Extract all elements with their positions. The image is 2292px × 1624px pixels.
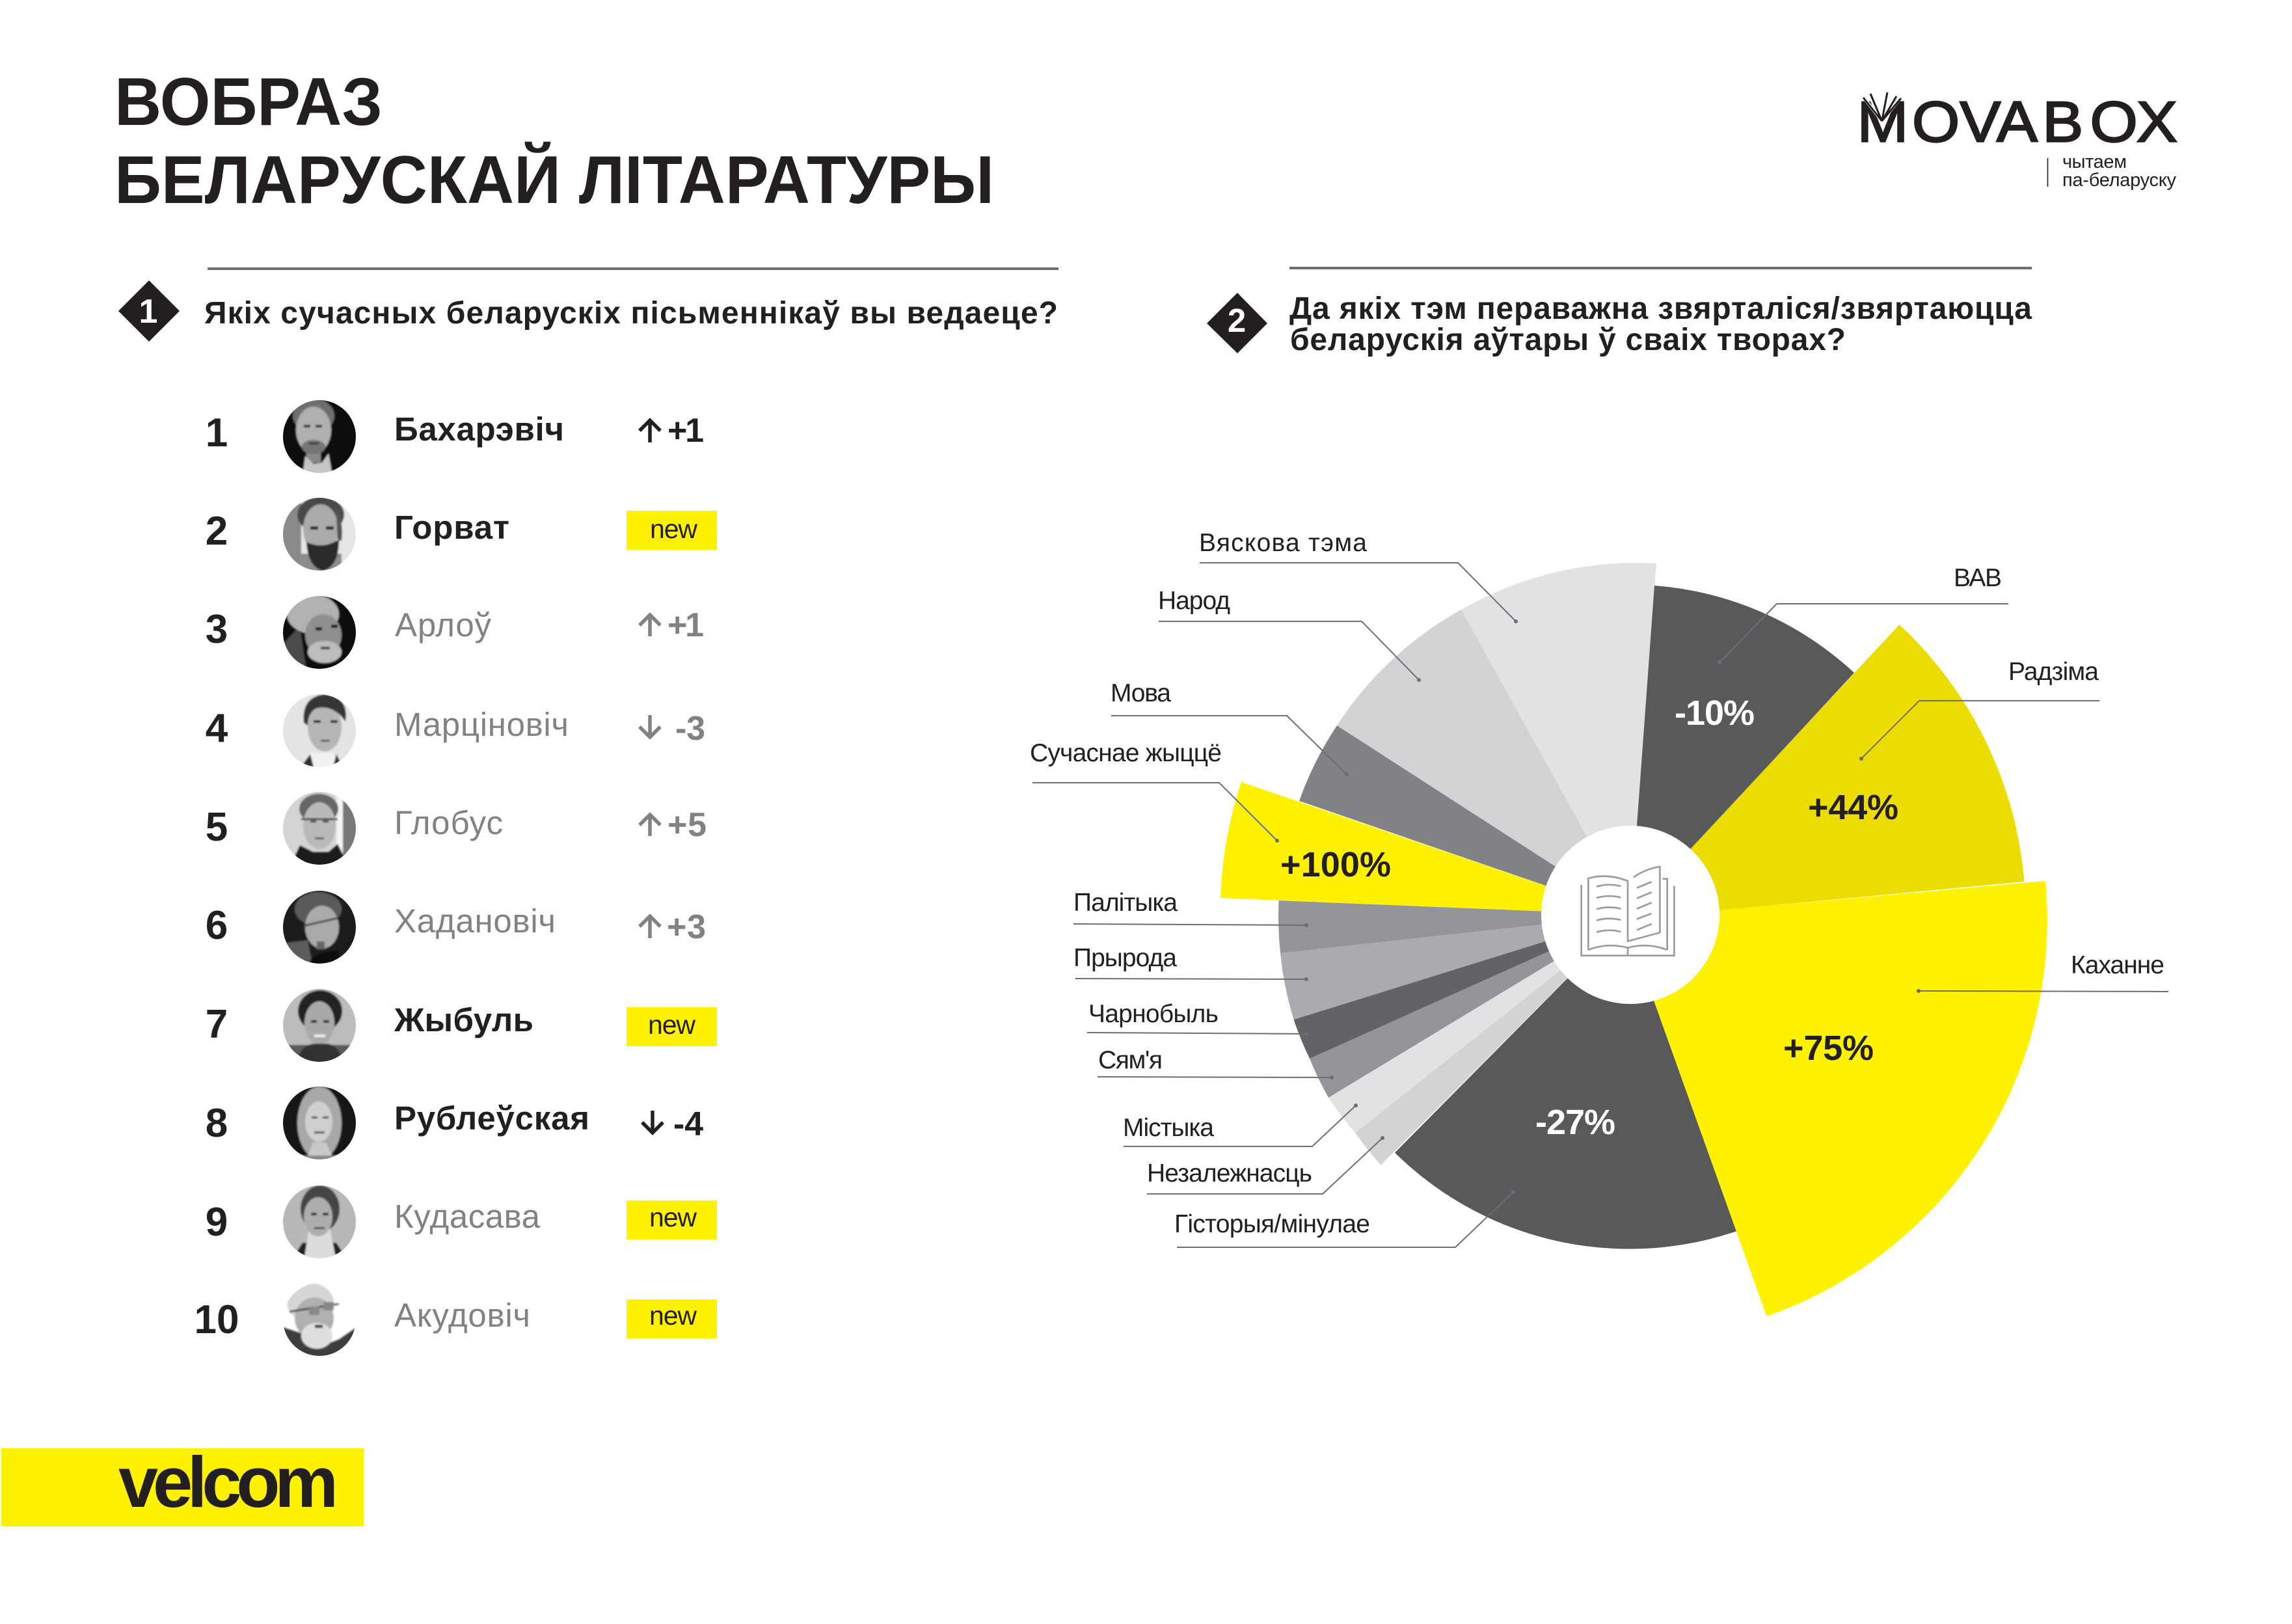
logo tagline: па-беларуску	[2062, 170, 2177, 191]
badge new 10: new	[649, 1301, 697, 1331]
row 5	[206, 789, 707, 867]
row 10	[195, 1280, 717, 1359]
logo tagline: чытаем	[2062, 152, 2127, 172]
label: Сям'я	[1098, 1046, 1334, 1079]
icon: open book	[1582, 867, 1674, 956]
title: БЕЛАРУСКАЙ ЛІТАРАТУРЫ	[115, 142, 994, 218]
name 6: Хадановіч	[394, 902, 556, 940]
row 3: 3	[206, 607, 228, 652]
logo book rays	[1866, 95, 1900, 121]
logo wordmark: MOVABOX	[1857, 90, 2177, 154]
label: Містыка: Містыка	[1123, 1114, 1214, 1142]
change 6	[640, 908, 706, 946]
row 2: 2	[206, 509, 228, 554]
sector: Прырода	[1280, 915, 1630, 1020]
row 6: 6	[206, 903, 228, 948]
label: Вяскова тэма	[1199, 529, 1518, 623]
sector: Чарнобыль	[1293, 915, 1630, 1059]
change 3: +1	[667, 606, 704, 644]
heading 2 text: Да якіх тэм пераважна звярталіся/звяртаюцца	[1289, 291, 2032, 326]
sector: Гісторыя/мінулае	[1395, 915, 1755, 1249]
change 8	[642, 1105, 703, 1143]
label: Радзіма: Радзіма	[2008, 658, 2099, 686]
label: Прырода: Прырода	[1073, 944, 1177, 972]
change 1: +1	[667, 412, 704, 450]
label: Палітыка	[1073, 889, 1308, 927]
change 5	[640, 806, 707, 844]
portrait 2	[283, 498, 356, 571]
label: Чарнобыль: Чарнобыль	[1088, 1000, 1219, 1028]
portrait 7	[283, 989, 356, 1062]
title	[115, 64, 994, 218]
row 8: 8	[206, 1101, 228, 1146]
row 1	[206, 398, 704, 476]
logo tagline	[2062, 152, 2177, 191]
name 7: Жыбуль	[394, 1001, 533, 1038]
label: Вяскова тэма: Вяскова тэма	[1199, 529, 1367, 557]
row 1: 1	[206, 411, 228, 455]
change 4: -3	[675, 710, 705, 748]
sector: ВАВ	[1630, 586, 1854, 915]
row 4: 4	[206, 706, 228, 751]
sector: Радзіма	[1630, 625, 2025, 919]
row 7	[206, 986, 717, 1064]
row 7: 7	[206, 1002, 228, 1047]
row 8	[206, 1084, 703, 1162]
center circle	[1541, 826, 1719, 1004]
label: Мова	[1111, 679, 1349, 776]
sector: Мова	[1299, 725, 1630, 915]
label: Незалежнасць	[1147, 1136, 1384, 1194]
row 4	[206, 692, 705, 770]
label: Палітыка: Палітыка	[1073, 889, 1178, 917]
badge new 9: new	[649, 1202, 697, 1232]
change 3	[640, 606, 704, 644]
row 6	[206, 888, 706, 966]
portrait 1	[283, 400, 356, 473]
label: Гісторыя/мінулае: Гісторыя/мінулае	[1174, 1210, 1370, 1238]
sector: Незалежнасць	[1355, 915, 1630, 1165]
label: Народ: Народ	[1158, 587, 1230, 615]
title: ВОБРАЗ	[115, 64, 383, 140]
label: Сучаснае жыццё	[1030, 739, 1279, 843]
badge new 7: new	[648, 1010, 695, 1040]
value: +44%: +44%	[1808, 788, 1898, 827]
name 5: Глобус	[394, 804, 503, 841]
badge new 2	[627, 511, 717, 550]
label: ВАВ: ВАВ	[1954, 564, 2002, 592]
label: Гісторыя/мінулае	[1174, 1190, 1515, 1247]
sector: Народ	[1337, 610, 1630, 915]
logo: Movabox	[1857, 90, 2177, 191]
label: Каханне: Каханне	[2071, 951, 2164, 979]
value: +75%: +75%	[1783, 1029, 1874, 1068]
value: -10%: -10%	[1675, 694, 1755, 733]
badge 2	[1207, 293, 1267, 353]
label: ВАВ	[1718, 564, 2008, 664]
name 4: Марціновіч	[394, 706, 569, 743]
name 9: Кудасава	[394, 1198, 541, 1235]
name 3: Арлоў	[395, 606, 492, 643]
name 1: Бахарэвіч	[394, 411, 564, 448]
label: Народ	[1158, 587, 1421, 682]
label: Чарнобыль	[1087, 1000, 1308, 1036]
change 4	[640, 710, 705, 748]
change 6: +3	[667, 908, 706, 946]
label: Містыка	[1123, 1103, 1358, 1146]
label: Радзіма	[1859, 658, 2099, 761]
heading 1 text: Якіх сучасных беларускіх пісьменнікаў вы ведаеце?	[204, 296, 1058, 331]
row 2	[206, 495, 717, 573]
portrait 9	[283, 1185, 356, 1258]
row 10: 10	[195, 1297, 239, 1342]
label: Сям'я: Сям'я	[1098, 1046, 1163, 1074]
panel: ranking list	[195, 398, 717, 1359]
name 10: Акудовіч	[394, 1297, 530, 1334]
sector: Сучаснае жыццё	[1220, 782, 1630, 915]
portrait 3	[283, 596, 356, 669]
label: Каханне	[1917, 951, 2168, 993]
sector: Вяскова тэма	[1461, 563, 1656, 915]
sector: Каханне	[1625, 881, 2047, 1316]
sector: Сям'я	[1310, 915, 1630, 1098]
logo divider	[2047, 158, 2048, 187]
badge new 2: new	[650, 514, 697, 544]
badge 1: 1	[139, 293, 157, 331]
portrait 8	[283, 1087, 356, 1159]
logo: velcom	[1, 1442, 364, 1526]
label: Прырода	[1073, 944, 1308, 981]
label: Незалежнасць: Незалежнасць	[1147, 1159, 1312, 1187]
row 3	[206, 593, 704, 671]
name 2: Горват	[394, 509, 509, 546]
portrait 6	[283, 891, 356, 964]
sector: Палітыка	[1278, 900, 1630, 953]
change 8: -4	[673, 1105, 703, 1143]
row 5: 5	[206, 805, 228, 850]
chart: radial themes pie	[1030, 529, 2168, 1316]
row 9	[206, 1183, 717, 1261]
portrait 10	[284, 1283, 355, 1356]
heading 2 text	[1289, 291, 2032, 357]
badge 2: 2	[1228, 302, 1246, 339]
label: Мова: Мова	[1111, 679, 1171, 707]
label: Сучаснае жыццё: Сучаснае жыццё	[1030, 739, 1222, 767]
badge new 9	[627, 1200, 717, 1239]
sector: Містыка	[1328, 915, 1630, 1133]
row 9: 9	[206, 1200, 228, 1245]
portrait 5	[283, 792, 356, 865]
badge new 7	[627, 1007, 717, 1046]
badge 1	[118, 280, 180, 342]
value: +100%: +100%	[1280, 845, 1391, 884]
heading 2 rule	[1289, 267, 2032, 269]
name 8: Рублеўская	[394, 1100, 589, 1137]
value: -27%: -27%	[1535, 1103, 1615, 1142]
badge new 10	[627, 1299, 717, 1338]
logo: velcom: velcom	[118, 1442, 338, 1522]
change 5: +5	[667, 806, 707, 844]
heading 1 rule	[208, 267, 1058, 270]
change 1	[640, 412, 704, 450]
heading 2 text: беларускія аўтары ў сваіх творах?	[1290, 323, 1846, 357]
portrait 4	[283, 694, 356, 767]
